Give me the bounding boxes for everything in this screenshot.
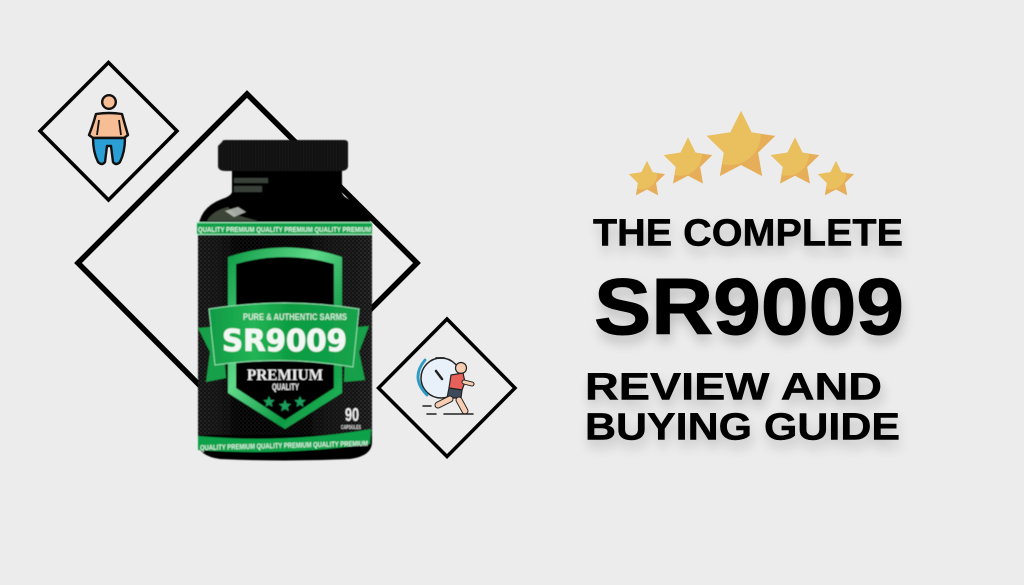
top label band — [197, 222, 372, 235]
shield emblem — [228, 248, 342, 429]
capsule label: CAPSULES — [341, 425, 361, 431]
title: SR9009: SR9009 — [594, 262, 904, 351]
icon: running person and speed dial — [418, 358, 473, 414]
title: buying guide: BUYING GUIDE — [585, 406, 900, 448]
five star rating — [625, 104, 854, 195]
capsule count: 90 — [345, 405, 359, 425]
bottle body — [198, 168, 372, 460]
infographic canvas — [38, 60, 908, 462]
label premium text: PREMIUM — [247, 367, 323, 384]
left ribbon tail — [198, 326, 226, 382]
title: the complete: THE COMPLETE — [593, 212, 903, 254]
green ribbon — [209, 303, 359, 367]
large diamond outline — [78, 94, 417, 433]
small diamond with weight loss icon — [40, 62, 177, 200]
star 2 — [664, 138, 712, 184]
star 5 — [818, 161, 854, 196]
title shadows (decorative blur): THE COMPLETE — [595, 220, 905, 262]
label quality text: QUALITY — [272, 382, 299, 392]
small diamond with runner icon — [378, 319, 515, 456]
title: review and: REVIEW AND — [585, 366, 882, 408]
ribbon product name: SR9009 — [222, 324, 347, 359]
right ribbon tail — [344, 326, 369, 382]
label three green stars — [263, 396, 306, 411]
title shadows (decorative blur): REVIEW AND — [587, 374, 884, 416]
title shadows (decorative blur): BUYING GUIDE — [587, 414, 902, 456]
star 1 — [629, 161, 665, 196]
ribbon subtitle: PURE & AUTHENTIC SARMS — [243, 312, 347, 322]
title shadows (decorative blur): SR9009 — [596, 270, 906, 359]
bottom label band: QUALITY PREMIUM QUALITY PREMIUM QUALITY PREMIUM — [200, 439, 368, 452]
bottle cap — [218, 140, 348, 171]
bottom label band — [198, 429, 371, 452]
icon: weight loss person — [89, 95, 128, 164]
star 3 — [706, 111, 776, 176]
top label band: QUALITY PREMIUM QUALITY PREMIUM QUALITY PREMIUM — [198, 225, 371, 234]
title shadows (decorative blur) — [587, 220, 906, 456]
star 4 — [770, 138, 820, 184]
product bottle — [197, 140, 372, 460]
